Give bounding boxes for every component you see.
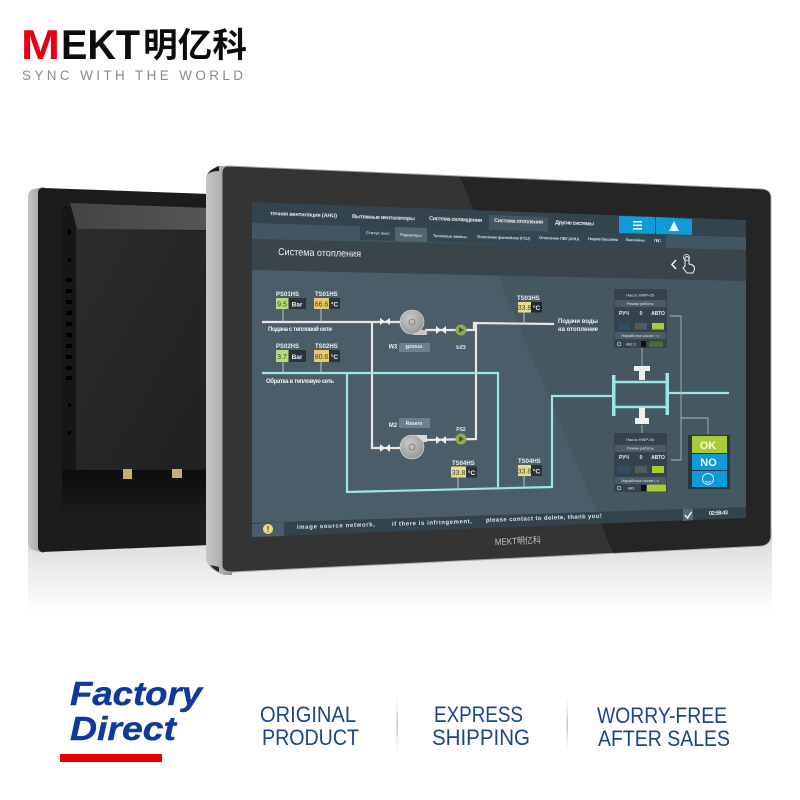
sub tab row bbox=[252, 223, 746, 250]
control signal lines bbox=[642, 316, 708, 460]
feature: original product: ORIGINAL bbox=[260, 702, 356, 727]
sensor PS02HS bbox=[276, 344, 306, 362]
bottom chamfer bbox=[210, 565, 219, 572]
sub tabs: Отопление фанкойлов (FCU) bbox=[477, 234, 531, 241]
glass reflection bbox=[460, 177, 770, 553]
sub tabs: Нагрев бассейна bbox=[588, 236, 619, 242]
sensor TS03HS: TS03HS bbox=[517, 296, 540, 302]
logo wordmark: MEKT: EKT bbox=[61, 21, 140, 68]
pump M2 lower: PS2 bbox=[456, 427, 466, 433]
screen title: Система отопления bbox=[278, 247, 361, 260]
fan housing bbox=[413, 330, 427, 335]
rear view of panel bbox=[28, 187, 210, 553]
rear vents bbox=[66, 230, 72, 435]
top tabs bbox=[270, 211, 594, 233]
control box: upper pump: Наработка часов / ч bbox=[621, 333, 659, 338]
sensor TS01HS: 66.6 bbox=[315, 302, 328, 308]
status buttons OK / NO / smile: OK bbox=[700, 440, 716, 452]
top tabs: Система охлаждения bbox=[429, 216, 482, 224]
control box: lower pump: РУЧ bbox=[619, 455, 629, 461]
scrolling notice text: image source network, bbox=[297, 522, 375, 531]
sensor TS05HS: °C bbox=[533, 468, 540, 476]
outlet valve bbox=[436, 326, 446, 334]
black glass bbox=[222, 166, 771, 572]
sensor TS02HS: 80.6 bbox=[315, 354, 328, 361]
feature: worry-free after sales bbox=[597, 703, 730, 751]
scrolling notice text: please contact to delete, thank you! bbox=[486, 514, 602, 524]
sub tabs: Тепловые завесы bbox=[433, 233, 468, 239]
top tab row bbox=[252, 202, 746, 237]
sensor TS04HS bbox=[451, 461, 477, 478]
front panel bbox=[206, 166, 771, 575]
control box: upper pump: 0 bbox=[640, 311, 643, 317]
label: supply from network: Подача с тепловой сети bbox=[268, 326, 332, 333]
upper pump bbox=[634, 366, 650, 380]
control box: upper pump: Насос HWP-05 bbox=[626, 292, 655, 298]
active sub tab bbox=[395, 227, 427, 242]
logo tagline: SYNC WITH THE WORLD bbox=[22, 68, 243, 83]
sensor TS01HS: TS01HS bbox=[315, 292, 338, 298]
main screen background bbox=[252, 268, 746, 524]
control box: lower pump: 483 bbox=[628, 486, 635, 490]
sensor TS04HS: 33.8 bbox=[452, 470, 465, 477]
control box: upper pump bbox=[614, 289, 667, 348]
rear left recess bbox=[62, 206, 78, 470]
exchanger flanges bbox=[612, 375, 616, 416]
flipped labels: M3 bbox=[389, 342, 398, 348]
rear housing box bbox=[76, 229, 210, 470]
top chamfer bbox=[207, 166, 219, 175]
top tabs: точная вентиляция (AHU) bbox=[270, 211, 337, 219]
lower pump bbox=[635, 408, 649, 424]
logo wordmark: MEKT: M bbox=[21, 21, 60, 68]
alert cell bbox=[252, 522, 284, 537]
sensor TS04HS: TS04HS bbox=[452, 461, 475, 467]
red underline bbox=[60, 754, 162, 762]
pump circle bbox=[456, 324, 466, 336]
logo Chinese name: 明亿科 bbox=[143, 27, 247, 65]
feature: original product bbox=[260, 702, 359, 750]
sensor PS02HS: 3.7 bbox=[277, 354, 287, 361]
floor reflection bbox=[28, 530, 772, 612]
sensor stems bbox=[283, 309, 524, 489]
control box: lower pump: 0 bbox=[640, 455, 643, 461]
control box: lower pump: Наработка часов / ч bbox=[621, 478, 659, 483]
labels: M2 bbox=[389, 423, 398, 429]
blue alert button bbox=[656, 217, 692, 235]
pump M2 lower bbox=[380, 418, 466, 459]
OK button bbox=[692, 436, 727, 453]
rear black plate bbox=[38, 188, 210, 552]
check cell bbox=[683, 509, 693, 521]
label: return to network: Обратка в тепловую сеть bbox=[266, 378, 334, 385]
sensor TS03HS: 33.8 bbox=[518, 305, 531, 312]
sensor TS02HS: °C bbox=[331, 353, 338, 361]
feature: worry-free after sales: WORRY-FREE bbox=[597, 703, 727, 728]
rear silver frame bbox=[28, 187, 44, 553]
logo bbox=[21, 21, 247, 83]
rear sloped top of housing bbox=[70, 203, 210, 230]
sensor TS05HS: 33.8 bbox=[518, 468, 531, 476]
control box: lower pump bbox=[614, 433, 667, 492]
control box: lower pump: АВТО bbox=[651, 455, 665, 461]
label: heating supply: на отопление bbox=[558, 327, 599, 333]
sub tabs bbox=[360, 226, 666, 249]
sensor TS05HS: TS04HS bbox=[518, 459, 541, 465]
smile button bbox=[692, 471, 727, 487]
sensor TS01HS bbox=[314, 292, 340, 309]
pump M2 lower: Reserv bbox=[406, 421, 423, 427]
sensor TS02HS bbox=[314, 344, 340, 362]
logo wordmark: MEKT bbox=[21, 21, 140, 68]
sub tabs: Статус лист bbox=[366, 230, 390, 236]
outlet valve bbox=[436, 436, 446, 444]
HMI screen bbox=[252, 202, 746, 537]
control box: lower pump: Насос HWP-06 bbox=[626, 437, 655, 442]
status buttons OK / NO / smile: NO bbox=[700, 457, 717, 469]
rear lower shadow bbox=[62, 470, 210, 515]
sub tabs: Радиаторы bbox=[400, 232, 423, 238]
exchanger tubes bbox=[613, 382, 668, 407]
NO button bbox=[692, 454, 727, 470]
cold water pipes bbox=[262, 373, 729, 492]
top tabs: Система отопления bbox=[494, 218, 543, 226]
pump M3 upper: PS3 bbox=[456, 343, 466, 349]
Factory Direct badge bbox=[60, 675, 204, 762]
sensor TS05HS bbox=[518, 459, 542, 476]
feature: original product: PRODUCT bbox=[262, 725, 359, 750]
sensor TS04HS: °C bbox=[468, 469, 475, 477]
feature: express shipping bbox=[432, 702, 530, 750]
scrolling notice text: if there is infringement, bbox=[392, 519, 472, 528]
clock: 02:58:43 bbox=[709, 510, 728, 517]
bezel logo: MEKT明亿科 bbox=[495, 534, 541, 547]
sub tab dark backgrounds bbox=[360, 226, 666, 249]
sub tabs: Бассейны bbox=[626, 237, 646, 243]
sensor TS03HS: °C bbox=[533, 304, 540, 312]
active tab background bbox=[489, 215, 548, 233]
feature: express shipping: EXPRESS bbox=[434, 702, 523, 727]
sub tabs: ПВС bbox=[654, 238, 661, 243]
heat exchanger bbox=[612, 366, 669, 424]
bottom status bar: ! bbox=[267, 525, 269, 534]
feature: worry-free after sales: AFTER SALES bbox=[598, 726, 730, 751]
screen shade bbox=[497, 274, 746, 512]
sensor PS01HS: 9.5 bbox=[277, 302, 287, 308]
sensor TS02HS: TS02HS bbox=[315, 344, 338, 350]
fan housing bbox=[414, 435, 427, 442]
control box: upper pump: РУЧ bbox=[619, 311, 629, 317]
status buttons OK / NO / smile bbox=[688, 435, 730, 489]
sensor PS01HS: Bar bbox=[292, 302, 303, 308]
sensor PS01HS bbox=[276, 292, 306, 309]
control box: upper pump: АВТО bbox=[651, 311, 665, 317]
header strip bbox=[252, 238, 746, 281]
control box: upper pump: Режим работы bbox=[626, 301, 654, 306]
top tabs: Другие системы bbox=[555, 220, 594, 227]
blue menu button bbox=[619, 216, 655, 234]
pump M3 upper bbox=[380, 310, 466, 352]
sub tabs: Отопление ПВУ (AHU) bbox=[539, 235, 580, 241]
pump M3 upper: Reserv bbox=[406, 343, 423, 349]
rear gold connectors bbox=[123, 469, 182, 479]
pump circle bbox=[456, 434, 466, 444]
valve bbox=[380, 318, 390, 325]
hot water pipes bbox=[262, 322, 554, 448]
control box: upper pump: 482.2 bbox=[626, 342, 637, 346]
silver side bezel bbox=[206, 166, 232, 575]
sensor TS03HS bbox=[517, 296, 542, 312]
label: heating supply bbox=[558, 319, 599, 333]
icon: warning dot bbox=[263, 524, 273, 534]
valve bbox=[380, 444, 390, 452]
heading: Factory bbox=[70, 675, 204, 712]
label: heating supply: Подачи воды bbox=[558, 319, 598, 325]
sensor PS02HS: PS02HS bbox=[276, 344, 299, 350]
feature: express shipping: SHIPPING bbox=[432, 725, 530, 750]
control box: lower pump: Режим работы bbox=[626, 446, 654, 450]
scrolling notice text bbox=[297, 514, 602, 531]
Factory Direct badge: Direct bbox=[70, 710, 178, 747]
bottom status bar bbox=[252, 507, 746, 537]
sensor TS01HS: °C bbox=[331, 300, 338, 308]
sensor PS02HS: Bar bbox=[292, 354, 303, 361]
sensor PS01HS: PS01HS bbox=[276, 292, 299, 298]
top tabs: Вытяжные вентиляторы bbox=[352, 214, 415, 222]
icon: back chevron and touch hand bbox=[672, 254, 695, 273]
